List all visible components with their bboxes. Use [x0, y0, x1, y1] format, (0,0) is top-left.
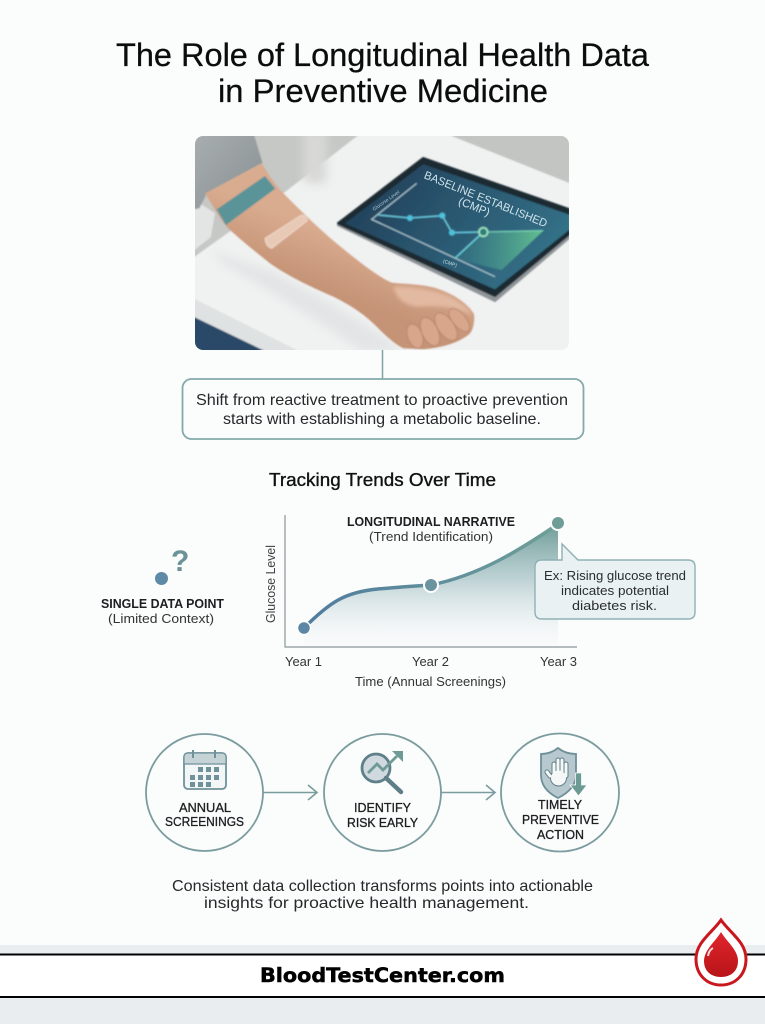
arm — [205, 163, 474, 350]
line chart: glucose level over time: Glucose Level — [263, 545, 278, 623]
callout: baseline: starts with establishing a metabolic baseline. — [223, 411, 541, 428]
step: timely preventive action — [501, 734, 619, 852]
step: timely preventive action: TIMELY — [538, 798, 583, 812]
line chart: glucose level over time: Year 2 — [412, 654, 449, 669]
arrow — [263, 785, 317, 800]
callout: baseline — [182, 379, 584, 439]
shadow under arm — [228, 260, 390, 350]
closing statement: Consistent data collection transforms points into actionable — [172, 878, 593, 895]
closing statement: insights for proactive health management. — [204, 895, 529, 912]
icon: shield with hand — [541, 748, 587, 798]
callout: rising glucose: diabetes risk. — [572, 598, 657, 613]
closing statement — [172, 878, 593, 912]
icon: blood drop logo — [696, 920, 746, 985]
footer band: BloodTestCenter.com — [260, 964, 505, 987]
step: identify risk early: RISK EARLY — [347, 816, 419, 830]
heading: tracking trends: Tracking Trends Over Time — [269, 470, 496, 490]
bandage — [265, 215, 307, 248]
callout: rising glucose: Ex: Rising glucose trend — [544, 568, 686, 583]
step: annual screenings: ANNUAL — [179, 801, 231, 815]
title: in Preventive Medicine — [218, 73, 548, 109]
callout: baseline: Shift from reactive treatment to proactive prevention — [196, 392, 568, 409]
line chart: glucose level over time: Time (Annual Screenings) — [355, 674, 506, 689]
title: The Role of Longitudinal Health Data — [116, 37, 649, 73]
photo: arm with bandage and tablet showing baseline chart: Glucose Level — [372, 190, 401, 213]
footer band — [0, 945, 765, 1024]
connector — [382, 350, 384, 379]
step: identify risk early: IDENTIFY — [354, 801, 412, 815]
line chart: glucose level over time: Year 3 — [540, 654, 577, 669]
photo: arm with bandage and tablet showing baseline chart — [190, 130, 580, 357]
line chart: glucose level over time — [263, 515, 577, 689]
single data point — [101, 545, 224, 626]
icon: magnifier with trend — [362, 751, 403, 792]
single data point: SINGLE DATA POINT — [101, 597, 224, 611]
photo: arm with bandage and tablet showing baseline chart: BASELINE ESTABLISHED — [422, 170, 549, 230]
line chart: glucose level over time: Year 1 — [285, 654, 322, 669]
callout: rising glucose — [535, 544, 695, 619]
step: timely preventive action: PREVENTIVE — [522, 813, 599, 827]
icon: calendar — [184, 750, 226, 789]
icon: dot with question mark: ? — [171, 545, 189, 578]
step: identify risk early — [324, 734, 441, 851]
armband — [217, 176, 275, 225]
photo: arm with bandage and tablet showing baseline chart: (CMP) — [457, 196, 492, 219]
title — [116, 37, 649, 109]
single data point: (Limited Context) — [108, 611, 214, 626]
tablet — [338, 158, 580, 301]
photo: arm with bandage and tablet showing baseline chart: (CMP) — [442, 259, 458, 269]
step: timely preventive action: ACTION — [537, 828, 584, 842]
step: annual screenings: SCREENINGS — [165, 815, 244, 829]
line chart: glucose level over time: LONGITUDINAL NARRATIVE — [347, 515, 515, 529]
callout: rising glucose: indicates potential — [561, 583, 669, 598]
step: annual screenings — [146, 734, 263, 851]
line chart: glucose level over time: (Trend Identification) — [369, 529, 493, 544]
arrow — [441, 785, 495, 800]
